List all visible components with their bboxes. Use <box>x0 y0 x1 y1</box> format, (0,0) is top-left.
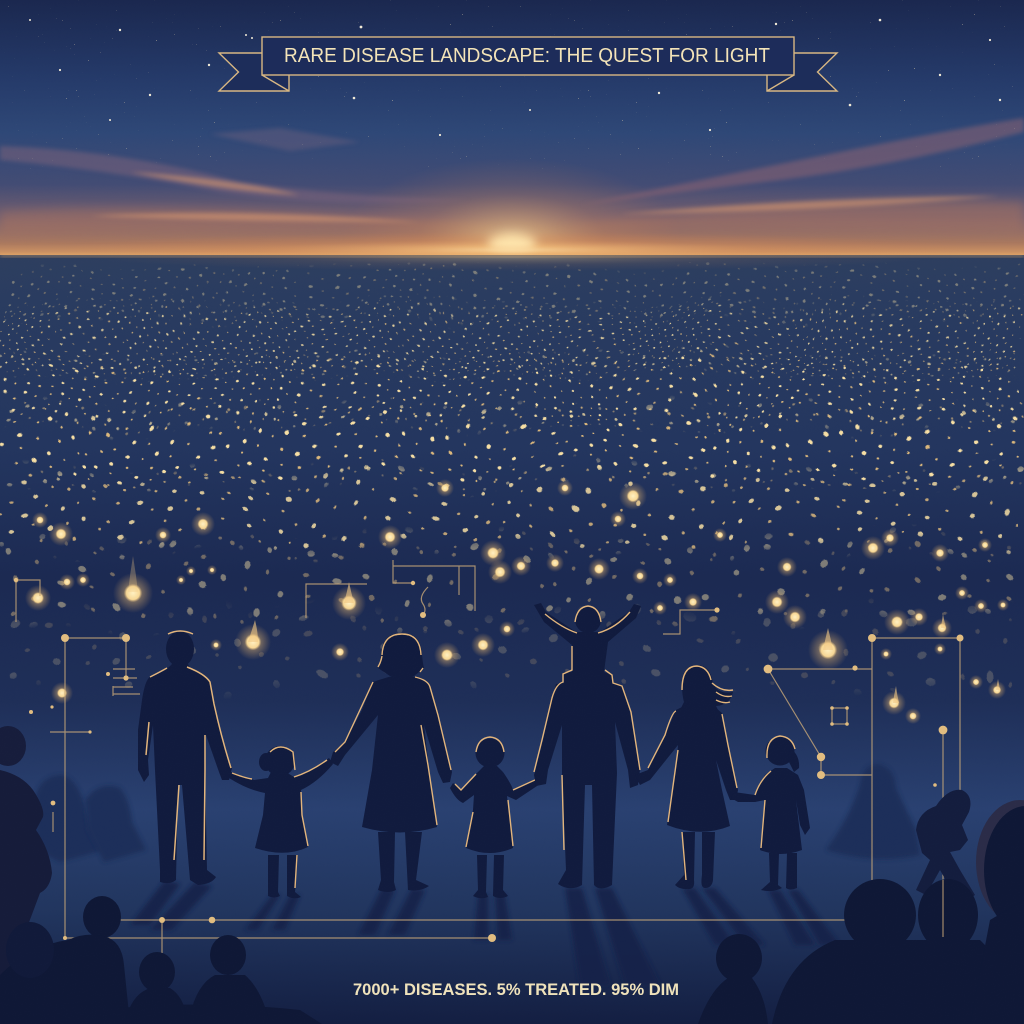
figure: small girl with ponytail <box>731 736 810 891</box>
ground shadows of family <box>130 880 840 985</box>
horizon line <box>0 254 1024 256</box>
stars <box>0 0 1024 170</box>
landscape field <box>0 255 1024 1024</box>
foreground crowd left <box>0 726 322 1024</box>
foreground crowd right <box>698 800 1024 1024</box>
field of small lights <box>0 262 1024 700</box>
figure: father on left <box>138 631 232 885</box>
bottom statistic caption: 7000+ DISEASES. 5% TREATED. 95% DIM <box>353 981 679 999</box>
mid silhouette: child facing right <box>916 790 975 905</box>
figure: middle child <box>450 737 540 898</box>
faded background figures <box>34 764 920 862</box>
vertical node line over crowd <box>942 880 944 937</box>
title banner: RARE DISEASE LANDSCAPE: THE QUEST FOR LIGHT <box>284 45 770 67</box>
figure: mother <box>330 633 452 892</box>
clouds at sunset <box>0 118 1024 234</box>
title banner <box>219 37 837 91</box>
circuit nodes <box>14 578 964 942</box>
figure: father carrying child on shoulders <box>534 603 641 888</box>
figure: child with ponytail <box>229 746 333 898</box>
circuit network lines <box>16 560 960 953</box>
night sky background <box>0 0 1024 256</box>
sunrise glow on horizon <box>52 158 972 318</box>
figure: girl with flowing hair <box>635 665 738 889</box>
horizon reflection <box>92 243 932 271</box>
larger glowing lights <box>25 479 1009 724</box>
flame tips on brightest lights <box>128 556 1000 703</box>
